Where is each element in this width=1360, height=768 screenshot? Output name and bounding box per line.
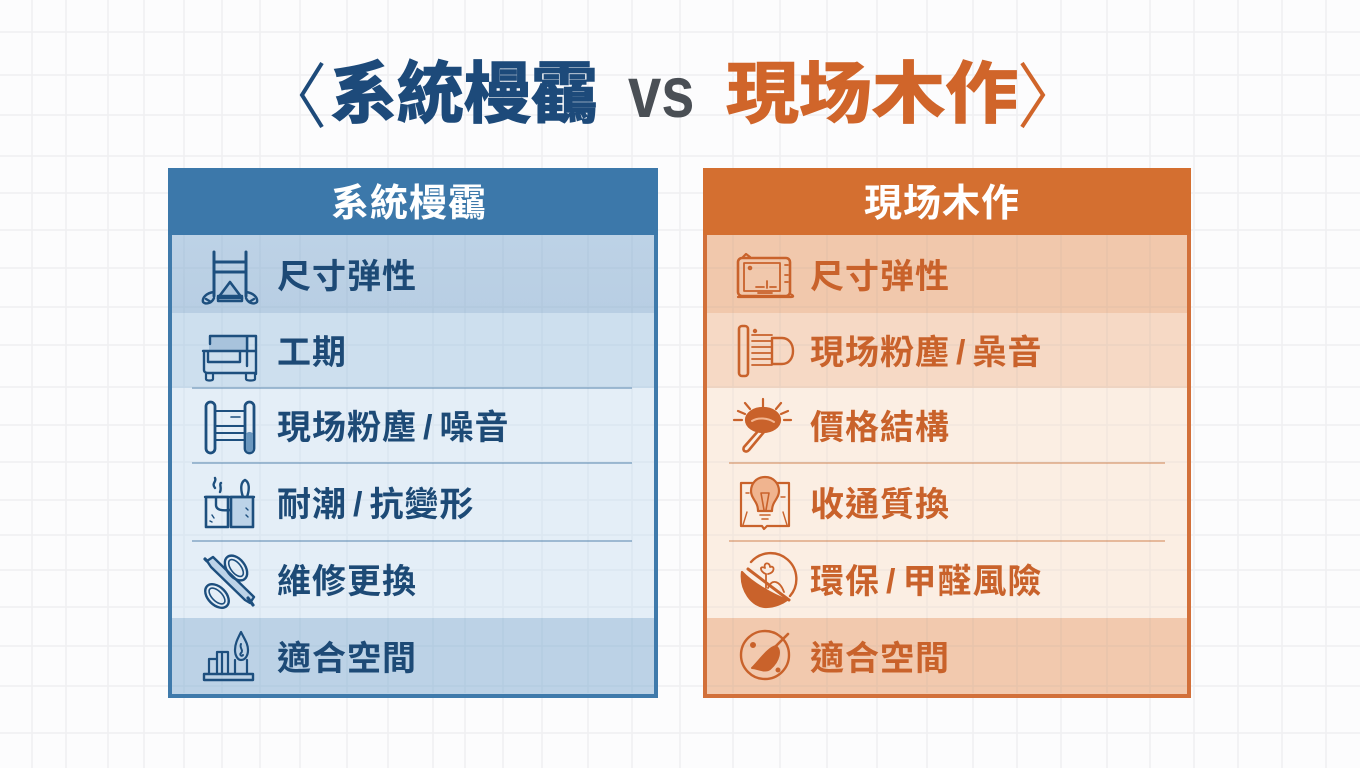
icon: circle with brush	[741, 631, 789, 679]
title: right bracket	[1020, 62, 1046, 128]
icon: sofa cabinet	[203, 336, 256, 380]
panel header: system cabinet	[168, 168, 658, 235]
icon: ladder frame	[203, 252, 257, 303]
panel header: on-site carpentry	[703, 168, 1191, 235]
title	[300, 53, 1046, 133]
title: system cabinet: 系統槾靍	[330, 57, 598, 132]
panel rows: system cabinet	[277, 258, 509, 678]
row label: size flexibility: 尺寸弹性	[277, 258, 417, 296]
icon: rail with lines	[739, 326, 793, 376]
row label: formaldehyde risk: 環保/甲醛風險	[810, 563, 1042, 601]
row label: repair: 維修更換	[277, 563, 417, 601]
header text: 系統槾靍	[331, 183, 487, 225]
row label: suitable space: 適合空間	[810, 640, 950, 678]
title: vs: vs	[628, 53, 694, 133]
row label: moisture and warp: 耐潮/抗變形	[277, 486, 474, 524]
panel: on-site carpentry	[703, 168, 1191, 698]
title: on-site carpentry: 現场木作	[726, 57, 1018, 132]
icon: bars and pen nib	[204, 632, 253, 680]
row label: suitable space: 適合空間	[277, 640, 417, 678]
row label: schedule: 工期	[277, 334, 347, 372]
icon: tablet device	[738, 254, 793, 297]
icon: panel with rails	[206, 402, 254, 453]
title: left bracket	[300, 62, 324, 128]
row label: size flexibility: 尺寸弹性	[810, 258, 950, 296]
icon: magnifier with rays	[734, 399, 791, 451]
panel: system cabinet	[168, 168, 658, 698]
row label: dust and noise: 現场粉塵/喿音	[810, 334, 1042, 372]
icon: rolling pin and rings	[201, 551, 254, 612]
icon: eco bowl with plant	[742, 553, 796, 607]
row label: dust and noise: 現场粉塵/噪音	[277, 409, 509, 447]
header text: 現场木作	[864, 183, 1020, 225]
row label: storage: 收通質換	[810, 486, 950, 524]
panel rows: on-site carpentry	[810, 258, 1042, 678]
row label: price structure: 價格結構	[810, 409, 950, 447]
icon: light bulb on book	[741, 477, 789, 529]
icon: two jars with steam	[205, 478, 254, 527]
